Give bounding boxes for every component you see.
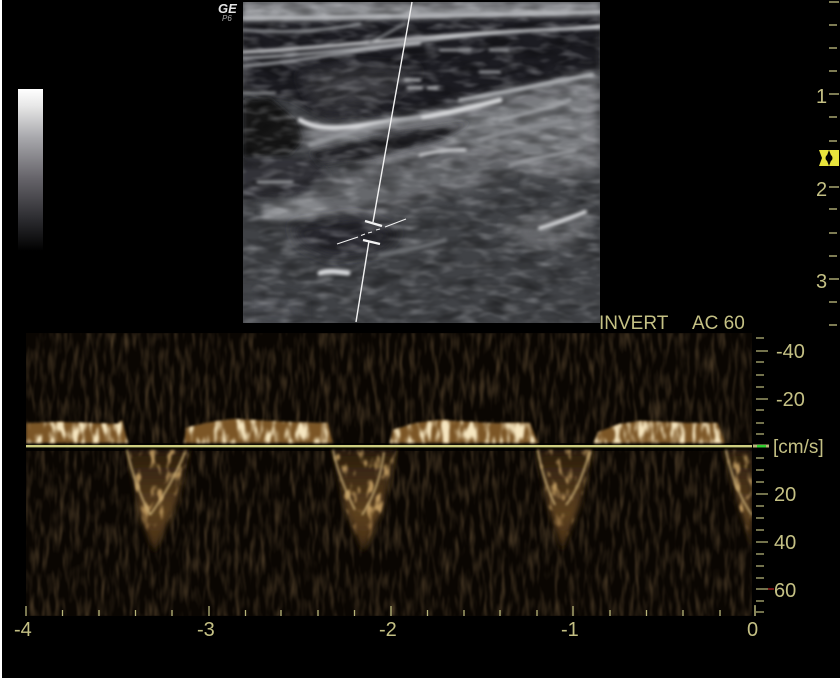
depth scale: 1 [816, 86, 827, 108]
time axis: -3 [197, 619, 215, 641]
doppler spectrum panel [26, 333, 752, 616]
velocity axis: -20 [776, 389, 805, 411]
baseline [26, 444, 769, 448]
tissue regions [243, 2, 600, 323]
velocity axis: [cm/s] [773, 437, 824, 458]
time axis: -1 [561, 619, 579, 641]
time axis: -2 [379, 619, 397, 641]
time axis: 0 [747, 619, 758, 641]
reverse flow V waveforms [127, 450, 752, 552]
depth scale: 3 [816, 271, 827, 293]
velocity axis [755, 338, 824, 616]
ultrasound B-mode image [243, 2, 600, 323]
time axis: -4 [14, 619, 32, 641]
settings label: AC 60 [692, 313, 745, 334]
velocity axis: 40 [774, 532, 796, 554]
settings label: INVERT [599, 313, 669, 334]
depth scale: 2 [816, 179, 827, 201]
velocity axis: -40 [776, 341, 805, 363]
settings label [599, 313, 745, 334]
GE logo: P6 [222, 14, 232, 23]
doppler gate line [337, 2, 412, 322]
velocity axis: 20 [774, 484, 796, 506]
time axis [14, 606, 758, 641]
grayscale bar [18, 89, 43, 251]
bright fascia streaks [243, 12, 600, 273]
velocity axis: 60 [774, 580, 796, 602]
GE logo [218, 1, 237, 23]
depth scale [816, 2, 839, 325]
forward flow bands [26, 419, 725, 443]
GE logo: GE [218, 1, 237, 16]
focus marker [819, 150, 839, 166]
